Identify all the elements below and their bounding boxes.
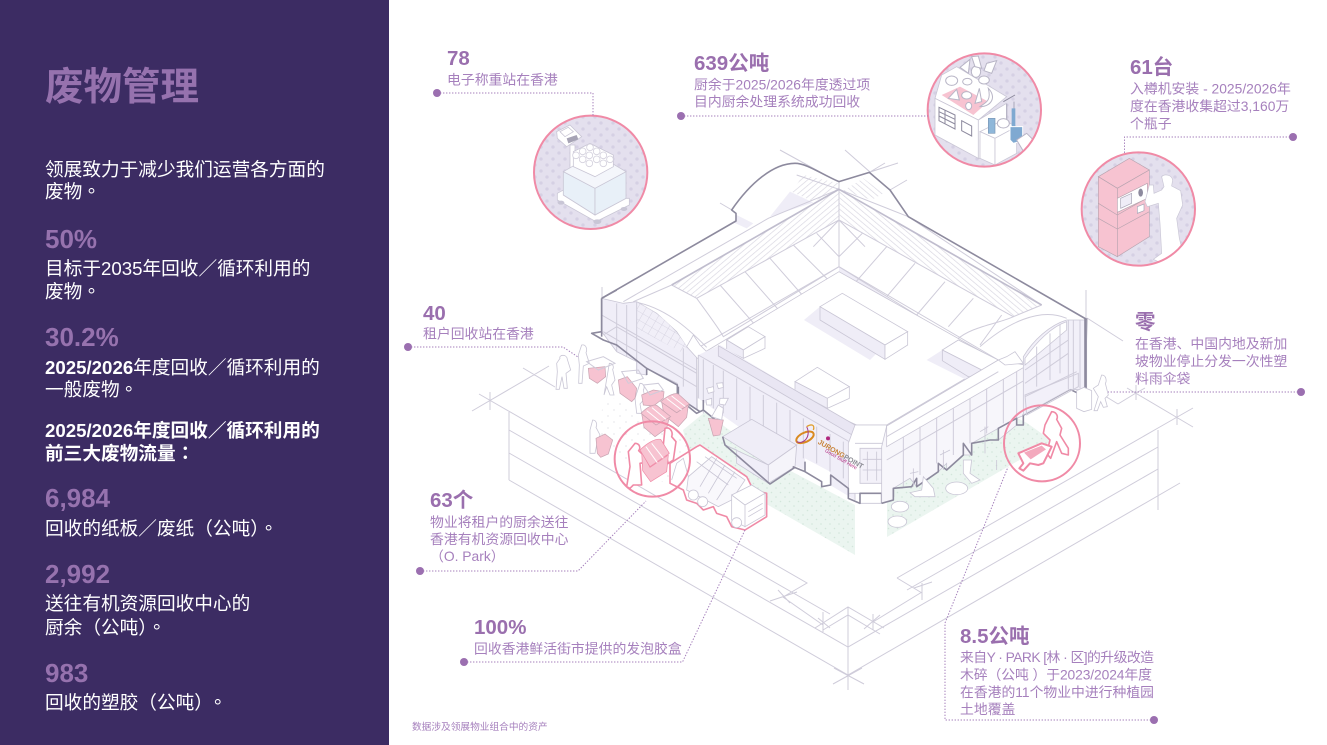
- callout: 63: [430, 489, 569, 564]
- callout: 61 machines: 入樽机安装 - 2025/2026年: [1130, 80, 1291, 96]
- callout: 63: （O. Park）: [430, 548, 505, 564]
- leader lines: [404, 89, 1305, 724]
- stat: 6,984: 6,984: [45, 483, 111, 513]
- callout: 61 machines: [1130, 55, 1291, 132]
- callout: zero: 零: [1135, 311, 1156, 334]
- shrubs and gardener: [888, 427, 997, 527]
- callout: zero: 在香港、中国内地及新加: [1135, 336, 1287, 352]
- callout: 63: 63个: [430, 489, 474, 512]
- building: roof: [602, 163, 1086, 437]
- people at collection station: [556, 345, 645, 453]
- callout: 8.5 tonnes: 在香港的11个物业中进行种植园: [960, 684, 1154, 700]
- callout: 40: 40: [423, 302, 446, 325]
- callout: 63: 香港有机资源回收中心: [430, 531, 569, 547]
- callout: 639 tonnes: 639公吨: [694, 52, 769, 75]
- inset circle: bin being moved: [615, 421, 690, 497]
- panel: left sidebar: [0, 0, 389, 745]
- building: left wing: [592, 290, 710, 412]
- stat: 2,992: [45, 559, 250, 638]
- stat: 983: 983: [45, 658, 88, 688]
- illustration: mall building: [592, 163, 1087, 503]
- text: intro: 。: [88, 176, 106, 196]
- logo: Jurong Point: Good Stuff Here: [824, 448, 858, 471]
- callout: 100%: 100%: [474, 616, 526, 639]
- inset: reverse vending machine: [1082, 152, 1195, 266]
- text: intro: [45, 159, 325, 202]
- building: corner bay and window: [793, 425, 893, 503]
- title: 废物管理: [45, 66, 199, 109]
- rooftop unit: right: [942, 340, 998, 377]
- subheading: top three waste streams: [45, 420, 320, 464]
- inset circle: wheelbarrow: [1004, 405, 1080, 481]
- rooftop unit: left: [727, 327, 765, 358]
- stat: 6,984: [45, 483, 284, 539]
- subheading: top three waste streams: 前三大废物流量: [45, 443, 176, 464]
- stat: 983: 。: [214, 686, 233, 708]
- callout: 61 machines: 个瓶子: [1130, 116, 1172, 132]
- stat: 50%: 50%: [45, 224, 97, 254]
- callout: 61 machines: 61台: [1130, 55, 1173, 79]
- callout: 63: 物业将租户的厨余送往: [430, 514, 569, 530]
- text: intro: 废物: [45, 181, 82, 202]
- stat: 2,992: 2,992: [45, 559, 110, 589]
- building: right facade: [882, 318, 1087, 503]
- stat: 30.2%: 一般废物: [45, 379, 120, 400]
- stat: 50%: 废物: [45, 281, 82, 302]
- callout: 78: 电子称重站在香港: [447, 72, 558, 88]
- subheading: top three waste streams: ：: [181, 442, 199, 463]
- inset: electronic weighing scale: [534, 116, 647, 229]
- callout: 40: 租户回收站在香港: [423, 326, 534, 342]
- callout: 78: 78: [447, 47, 470, 70]
- building: flat roof and rooftop units: [700, 272, 998, 425]
- stat: 983: 回收的塑胶（公吨）: [45, 692, 204, 713]
- stat: 50%: 目标于2035年回收／循环利用的: [45, 258, 310, 279]
- callout: 78: [447, 47, 558, 88]
- stat: 983: [45, 658, 233, 713]
- callout: 639 tonnes: 目内厨余处理系统成功回收: [694, 94, 860, 110]
- rooftop unit: middle: [795, 367, 849, 408]
- large pink bins: [641, 394, 689, 437]
- callout: 8.5 tonnes: 土地覆盖: [960, 701, 1016, 717]
- stat: 30.2%: 2025/2026年度回收／循环利用的: [45, 357, 320, 378]
- illustration: garden and wheelbarrow: [888, 375, 1108, 527]
- callout: 100%: [474, 616, 682, 656]
- callout: 61 machines: 度在香港收集超过3,160万: [1130, 98, 1289, 114]
- site ground lines: [472, 150, 1193, 690]
- callout: 100%: 回收香港鲜活街市提供的发泡胶盒: [474, 640, 682, 656]
- callout: 639 tonnes: 厨余于2025/2026年度透过项: [694, 76, 870, 92]
- building: low extension block: [723, 419, 797, 484]
- garden areas: [590, 395, 1052, 555]
- stat: 2,992: 厨余（公吨）: [45, 617, 148, 638]
- text: intro: 领展致力于减少我们运营各方面的: [45, 159, 325, 180]
- callout: 8.5 tonnes: 木碎（公吨 ）于2023/2024年度: [960, 666, 1152, 682]
- callout: 8.5 tonnes: 8.5公吨: [960, 625, 1030, 648]
- rooftop unit: large: [820, 293, 908, 359]
- garbage truck: [670, 445, 767, 530]
- stat: 30.2%: 。: [125, 374, 144, 394]
- callout: zero: 坡物业停止分发一次性塑: [1135, 353, 1287, 369]
- building: outer roof outline: [602, 163, 1086, 390]
- footnote: 数据涉及领展物业组合中的资产: [412, 720, 548, 733]
- stat: 2,992: 。: [153, 612, 172, 632]
- callout: 639 tonnes: [694, 52, 870, 110]
- person with umbrella and bag dispenser: [1077, 375, 1108, 412]
- callout: 8.5 tonnes: 来自Y · PARK [林 · 区]的升级改造: [960, 649, 1154, 665]
- stat: 30.2%: 30.2%: [45, 322, 119, 352]
- callout: zero: 料雨伞袋: [1135, 370, 1191, 386]
- subheading: top three waste streams: 2025/2026年度回收／循环利用的: [45, 420, 320, 441]
- callout: 8.5 tonnes: [960, 625, 1154, 717]
- stat: 30.2%: [45, 322, 320, 400]
- stat: 50%: [45, 224, 310, 302]
- stat: 50%: 。: [88, 276, 106, 296]
- bin with food waste: [706, 383, 728, 436]
- stat: 6,984: 回收的纸板／废纸（公吨）: [45, 518, 260, 539]
- items on trolleys: [587, 357, 663, 395]
- stat: 2,992: 送往有机资源回收中心的: [45, 593, 250, 614]
- stat: 6,984: 。: [265, 512, 284, 534]
- illustration: recycling station, bins and people: [556, 345, 865, 530]
- small pink bins: [588, 367, 664, 457]
- building: main front facade: [678, 345, 855, 500]
- inset: food waste processor: [928, 53, 1041, 167]
- callout: 40: [423, 302, 534, 342]
- logo: Jurong Point: [795, 425, 865, 471]
- building: right wing: [998, 318, 1087, 415]
- callout: zero: [1135, 311, 1287, 386]
- logo: Jurong Point: JURONGPOINT: [816, 439, 865, 471]
